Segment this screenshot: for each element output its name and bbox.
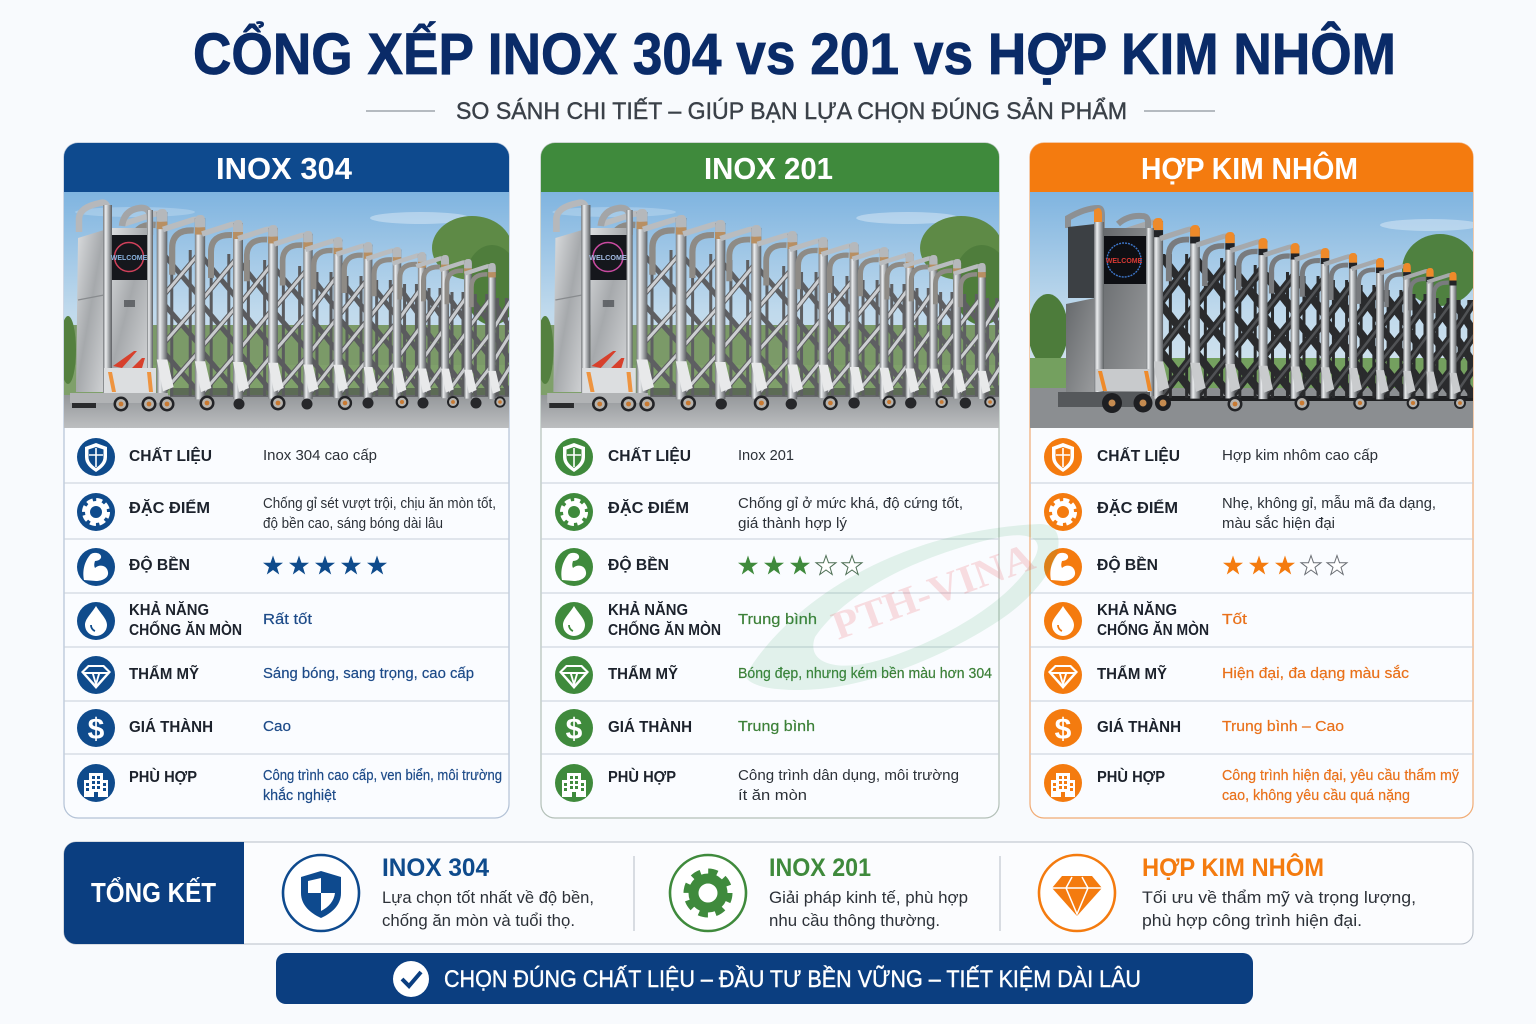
- row: thẩm mỹ: [77, 656, 474, 694]
- label: [608, 600, 721, 639]
- summary: hợp kim nhôm: [1039, 852, 1416, 931]
- label: [1097, 600, 1209, 639]
- row: phù hợp: [555, 764, 959, 804]
- value: Công trình dân dụng, môi trường: [738, 767, 959, 784]
- watermark: PTH-VINA: [826, 534, 1040, 648]
- title: CỔNG XẾP INOX 304 vs 201 vs HỢP KIM NHÔM: [193, 22, 1396, 87]
- label: GIÁ THÀNH: [608, 717, 692, 736]
- row: chống ăn mòn: [555, 600, 817, 640]
- icon: building: [1051, 773, 1075, 797]
- row: độ bền: [77, 548, 387, 586]
- row: đặc điểm: [555, 493, 963, 532]
- icon: diamond: [81, 665, 111, 689]
- row: độ bền: [1044, 548, 1347, 586]
- summary: inox 304: [283, 854, 594, 931]
- value: Tốt: [1222, 611, 1248, 628]
- icon: arm: [1050, 553, 1075, 581]
- label: ĐỘ BỀN: [1097, 555, 1158, 574]
- bottom banner: [276, 953, 1253, 1004]
- value: màu sắc hiện đại: [1222, 515, 1335, 532]
- banner text: CHỌN ĐÚNG CHẤT LIỆU – ĐẦU TƯ BỀN VỮNG – TIẾT KIỆM DÀI LÂU: [444, 965, 1141, 993]
- icon: gear: [670, 855, 746, 931]
- label: ĐẶC ĐIỂM: [129, 498, 210, 517]
- stars: 3 of 5: [1223, 556, 1347, 574]
- photo: aluminium alloy gate: [1028, 192, 1480, 428]
- text: [769, 854, 968, 930]
- header: inox 201: [541, 143, 999, 192]
- icon: drop: [1052, 606, 1074, 636]
- row: chất liệu: [77, 438, 377, 476]
- subtitle: SO SÁNH CHI TIẾT – GIÚP BẠN LỰA CHỌN ĐÚNG SẢN PHẨM: [456, 96, 1127, 125]
- text: Tối ưu về thẩm mỹ và trọng lượng,: [1142, 888, 1416, 907]
- value: Chống gỉ ở mức khá, độ cứng tốt,: [738, 495, 963, 512]
- icon: arm: [83, 553, 108, 581]
- row: đặc điểm: [77, 493, 496, 532]
- photo: inox 201 gate: [537, 192, 1011, 428]
- row: giá thành: [1044, 709, 1344, 747]
- label: ĐẶC ĐIỂM: [1097, 498, 1178, 517]
- text: INOX 201: [769, 854, 871, 882]
- label: ĐỘ BỀN: [608, 555, 669, 574]
- icon: gear: [84, 500, 108, 524]
- panel: inox 201: [537, 143, 1011, 818]
- label: PHÙ HỢP: [1097, 767, 1165, 786]
- value: độ bền cao, sáng bóng dài lâu: [263, 515, 443, 532]
- label: ĐỘ BỀN: [129, 555, 190, 574]
- row: giá thành: [555, 709, 815, 747]
- value: Nhẹ, không gỉ, mẫu mã đa dạng,: [1222, 495, 1436, 512]
- value: [738, 767, 959, 804]
- label: CHẤT LIỆU: [608, 446, 691, 465]
- label: CHỐNG ĂN MÒN: [129, 619, 242, 639]
- value: cao, không yêu cầu quá nặng: [1222, 787, 1410, 804]
- row: độ bền: [555, 548, 862, 586]
- value: khắc nghiệt: [263, 787, 337, 804]
- icon: shield: [85, 443, 107, 472]
- icon: dollar: $: [88, 713, 105, 746]
- icon: building: [562, 773, 586, 797]
- row: chống ăn mòn: [77, 600, 313, 640]
- value: Trung bình: [738, 611, 817, 628]
- label: CHẤT LIỆU: [1097, 446, 1180, 465]
- value: Cao: [263, 718, 291, 735]
- icon: drop: [85, 606, 107, 636]
- text: Lựa chọn tốt nhất về độ bền,: [382, 888, 594, 907]
- stars: 5 of 5: [263, 556, 387, 574]
- value: Hiện đại, đa dạng màu sắc: [1222, 665, 1410, 682]
- value: [1222, 495, 1436, 532]
- row: chất liệu: [555, 438, 794, 476]
- icon: shield: [1052, 443, 1074, 472]
- label: CHỐNG ĂN MÒN: [1097, 619, 1209, 639]
- value: giá thành hợp lý: [738, 515, 847, 532]
- icon: gear: [562, 500, 586, 524]
- value: Inox 201: [738, 447, 794, 464]
- value: Công trình hiện đại, yêu cầu thẩm mỹ: [1222, 767, 1459, 784]
- watermark: [745, 524, 1059, 690]
- icon: gear: [1051, 500, 1075, 524]
- value: [1222, 767, 1459, 804]
- label: THẨM MỸ: [1097, 663, 1167, 683]
- icon: arm: [561, 553, 586, 581]
- value: Bóng đẹp, nhưng kém bền màu hơn 304: [738, 665, 992, 682]
- icon: diamond: [1039, 855, 1115, 931]
- row: thẩm mỹ: [1044, 656, 1410, 694]
- text: Giải pháp kinh tế, phù hợp: [769, 888, 968, 907]
- photo: aluminium alloy gate: WELCOME: [1106, 258, 1143, 265]
- header: hợp kim nhôm: [1030, 143, 1473, 192]
- icon: shield: [283, 855, 359, 931]
- header: hợp kim nhôm: HỢP KIM NHÔM: [1141, 150, 1358, 186]
- icon: drop: [563, 606, 585, 636]
- row: chất liệu: [1044, 438, 1378, 476]
- label: [129, 600, 242, 639]
- text: INOX 304: [382, 854, 489, 882]
- text: [382, 854, 594, 930]
- stars: 3 of 5: [738, 556, 862, 574]
- row: thẩm mỹ: [555, 656, 992, 694]
- value: [263, 495, 496, 532]
- icon: check: [393, 961, 429, 997]
- row: đặc điểm: [1044, 493, 1436, 532]
- value: Trung bình – Cao: [1222, 718, 1344, 735]
- label: KHẢ NĂNG: [129, 600, 209, 619]
- label: KHẢ NĂNG: [608, 600, 688, 619]
- value: Inox 304 cao cấp: [263, 447, 377, 464]
- row: phù hợp: [1044, 764, 1459, 804]
- label: CHẤT LIỆU: [129, 446, 212, 465]
- icon: dollar: $: [1055, 713, 1072, 746]
- label: GIÁ THÀNH: [1097, 717, 1181, 736]
- label: CHỐNG ĂN MÒN: [608, 619, 721, 639]
- text: nhu cầu thông thường.: [769, 911, 940, 930]
- icon: diamond: [559, 665, 589, 689]
- icon: building: [84, 773, 108, 797]
- value: Chống gỉ sét vượt trội, chịu ăn mòn tốt,: [263, 495, 496, 512]
- summary heading: [64, 842, 244, 944]
- text: [1142, 852, 1416, 930]
- value: [738, 495, 963, 532]
- text: chống ăn mòn và tuổi thọ.: [382, 911, 575, 930]
- label: KHẢ NĂNG: [1097, 600, 1177, 619]
- photo: inox 304 gate: [60, 192, 520, 428]
- icon: shield: [563, 443, 585, 472]
- value: Rất tốt: [263, 611, 313, 628]
- row: giá thành: [77, 709, 291, 747]
- label: GIÁ THÀNH: [129, 717, 213, 736]
- panel: inox 304: [60, 143, 520, 818]
- summary heading: TỔNG KẾT: [91, 877, 216, 908]
- label: THẨM MỸ: [608, 663, 678, 683]
- text: HỢP KIM NHÔM: [1142, 852, 1324, 882]
- label: THẨM MỸ: [129, 663, 199, 683]
- summary: inox 201: [670, 854, 968, 931]
- icon: dollar: $: [566, 713, 583, 746]
- value: [263, 767, 502, 804]
- value: ít ăn mòn: [738, 787, 807, 804]
- row: chống ăn mòn: [1044, 600, 1248, 640]
- header: inox 304: INOX 304: [216, 151, 353, 186]
- value: Trung bình: [738, 718, 815, 735]
- header: inox 304: [64, 143, 509, 192]
- text: phù hợp công trình hiện đại.: [1142, 911, 1362, 930]
- icon: diamond: [1048, 665, 1078, 689]
- label: ĐẶC ĐIỂM: [608, 498, 689, 517]
- label: PHÙ HỢP: [608, 767, 676, 786]
- label: PHÙ HỢP: [129, 767, 197, 786]
- value: Hợp kim nhôm cao cấp: [1222, 447, 1378, 464]
- panel: summary: [64, 842, 1473, 944]
- row: phù hợp: [77, 764, 502, 804]
- value: Công trình cao cấp, ven biển, môi trường: [263, 767, 502, 784]
- value: Sáng bóng, sang trọng, cao cấp: [263, 665, 474, 682]
- header: inox 201: INOX 201: [704, 151, 833, 186]
- panel: hợp kim nhôm: [1028, 143, 1480, 818]
